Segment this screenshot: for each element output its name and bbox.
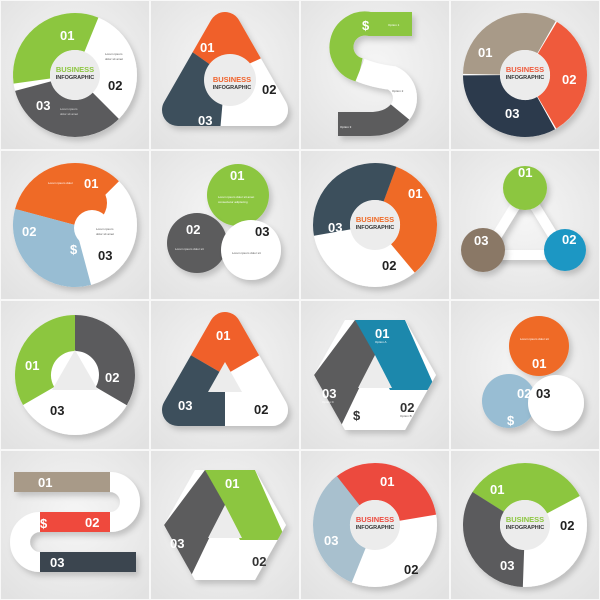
tile r0c0: ring: INFOGRAPHIC bbox=[56, 75, 94, 81]
tile r2c3: three circles: $ bbox=[507, 413, 515, 428]
tile r3c3: ring green: INFOGRAPHIC bbox=[506, 525, 544, 531]
tile r0c1: rounded triangle: INFOGRAPHIC bbox=[213, 85, 251, 91]
tile r0c0: ring: 02 bbox=[108, 78, 122, 93]
tile r2c3: three circles: 02 bbox=[517, 386, 531, 401]
tile r3c2: swirl ring red bbox=[301, 451, 449, 599]
tile r3c0: S bands bbox=[1, 451, 149, 599]
tile r1c3: three circles with arrows: 02 bbox=[562, 232, 576, 247]
tile r1c0: yin-yang pie: Lorem ipsum bbox=[96, 227, 114, 231]
tile r2c1: rounded triangle: 03 bbox=[178, 398, 192, 413]
tile r3c3: ring green: 03 bbox=[500, 558, 514, 573]
tile r3c3: ring green: 01 bbox=[490, 482, 504, 497]
tile r0c1: rounded triangle: 03 bbox=[198, 113, 212, 128]
tile r2c2: hexagon: Option C bbox=[322, 400, 335, 404]
tile r1c3: three circles with arrows bbox=[451, 151, 599, 299]
tile r3c2: swirl ring red: BUSINESS bbox=[356, 515, 394, 524]
tile r1c2: swirl ring: BUSINESS bbox=[356, 215, 394, 224]
tile r0c0: ring: Lorem ipsum bbox=[60, 107, 78, 111]
tile r0c1: rounded triangle: BUSINESS bbox=[213, 75, 251, 84]
tile r3c2: swirl ring red: INFOGRAPHIC bbox=[356, 525, 394, 531]
tile r1c1: three circles: Lorem ipsum dolor sit bbox=[232, 251, 261, 255]
tile r2c3: three circles: 01 bbox=[532, 356, 546, 371]
tile r0c3: puzzle ring: 02 bbox=[562, 72, 576, 87]
tile r3c0: S bands: 01 bbox=[38, 475, 52, 490]
tile r1c1: three circles: Lorem ipsum dolor sit amet bbox=[218, 195, 254, 199]
tile r1c2: swirl ring bbox=[301, 151, 449, 299]
tile r1c0: yin-yang pie: 02 bbox=[22, 224, 36, 239]
tile r0c3: puzzle ring: BUSINESS bbox=[506, 65, 544, 74]
tile r3c1: hexagon: 03 bbox=[170, 536, 184, 551]
tile r0c3: puzzle ring: 03 bbox=[505, 106, 519, 121]
tile r2c1: rounded triangle bbox=[150, 300, 300, 450]
tile r1c1: three circles: 03 bbox=[255, 224, 269, 239]
tile r2c3: three circles bbox=[451, 301, 599, 449]
tile r2c2: hexagon: Option B bbox=[400, 414, 412, 418]
tile r1c2: swirl ring: INFOGRAPHIC bbox=[356, 225, 394, 231]
tile r0c2: S shape: Option 3 bbox=[340, 125, 352, 129]
tile r1c3: three circles with arrows: 03 bbox=[474, 233, 488, 248]
tile r1c0: yin-yang pie: Lorem ipsum dolor bbox=[48, 181, 73, 185]
tile r0c3: puzzle ring: 01 bbox=[478, 45, 492, 60]
tile r2c2: hexagon: $ bbox=[353, 408, 361, 423]
tile r2c0: round triangle ring: 01 bbox=[25, 358, 39, 373]
tile r0c3: puzzle ring: INFOGRAPHIC bbox=[506, 75, 544, 81]
tile r1c1: three circles: Lorem ipsum dolor sit bbox=[175, 247, 204, 251]
tile r3c0: S bands: 03 bbox=[50, 555, 64, 570]
tile r2c1: rounded triangle: 02 bbox=[254, 402, 268, 417]
tile r3c3: ring green bbox=[451, 451, 599, 599]
tile r0c1: rounded triangle: 02 bbox=[262, 82, 276, 97]
tile r2c2: hexagon: Option A bbox=[375, 340, 387, 344]
tile r3c2: swirl ring red: 02 bbox=[404, 562, 418, 577]
tile r1c1: three circles: consectetur adipiscing bbox=[218, 200, 248, 204]
tile r0c2: S shape: $ bbox=[362, 18, 370, 33]
tile r0c3: puzzle ring bbox=[451, 1, 599, 149]
tile r0c1: rounded triangle: 01 bbox=[200, 40, 214, 55]
tile r1c3: three circles with arrows: 01 bbox=[518, 165, 532, 180]
tile r0c0: ring: dolor sit amet bbox=[60, 112, 78, 116]
tile r3c2: swirl ring red: 01 bbox=[380, 474, 394, 489]
tile r0c0: ring: BUSINESS bbox=[56, 65, 94, 74]
tile r1c0: yin-yang pie: 01 bbox=[84, 176, 98, 191]
tile r3c1: hexagon: 02 bbox=[252, 554, 266, 569]
tile r0c2: S shape bbox=[301, 1, 449, 149]
tile r3c3: ring green: 02 bbox=[560, 518, 574, 533]
tile r3c1: hexagon: 01 bbox=[225, 476, 239, 491]
tile r1c2: swirl ring: 02 bbox=[382, 258, 396, 273]
tile r2c2: hexagon: 02 bbox=[400, 400, 414, 415]
tile r2c2: hexagon: 01 bbox=[375, 326, 389, 341]
tile r1c2: swirl ring: 03 bbox=[328, 220, 342, 235]
tile r2c3: three circles: 03 bbox=[536, 386, 550, 401]
tile r1c1: three circles: 01 bbox=[230, 168, 244, 183]
tile r3c3: ring green: BUSINESS bbox=[506, 515, 544, 524]
tile r2c0: round triangle ring bbox=[1, 301, 149, 449]
tile r1c0: yin-yang pie: $ bbox=[70, 242, 78, 257]
tile r0c0: ring bbox=[1, 1, 149, 149]
tile r2c1: rounded triangle: 01 bbox=[216, 328, 230, 343]
tile r2c2: hexagon bbox=[300, 300, 450, 450]
tile r1c1: three circles: 02 bbox=[186, 222, 200, 237]
tile r2c2: hexagon: 03 bbox=[322, 386, 336, 401]
tile r2c3: three circles: Lorem ipsum dolor sit bbox=[520, 337, 549, 341]
tile r1c0: yin-yang pie: dolor sit amet bbox=[96, 232, 114, 236]
tile r3c0: S bands: $ bbox=[40, 516, 48, 531]
tile r2c0: round triangle ring: 02 bbox=[105, 370, 119, 385]
tile r0c0: ring: Lorem ipsum bbox=[105, 52, 123, 56]
tile r1c0: yin-yang pie: 03 bbox=[98, 248, 112, 263]
tile r1c2: swirl ring: 01 bbox=[408, 186, 422, 201]
tile r0c0: ring: 03 bbox=[36, 98, 50, 113]
tile r0c0: ring: dolor sit amet bbox=[105, 57, 123, 61]
tile r3c0: S bands: 02 bbox=[85, 515, 99, 530]
tile r1c0: yin-yang pie bbox=[1, 151, 149, 299]
tile r0c2: S shape: Option 1 bbox=[388, 23, 400, 27]
tile r3c2: swirl ring red: 03 bbox=[324, 533, 338, 548]
tile r1c1: three circles bbox=[151, 151, 299, 299]
tile r0c2: S shape: Option 2 bbox=[392, 89, 404, 93]
tile r3c1: hexagon bbox=[150, 450, 300, 600]
tile r0c1: rounded triangle bbox=[150, 0, 300, 150]
tile r2c0: round triangle ring: 03 bbox=[50, 403, 64, 418]
tile r0c0: ring: 01 bbox=[60, 28, 74, 43]
